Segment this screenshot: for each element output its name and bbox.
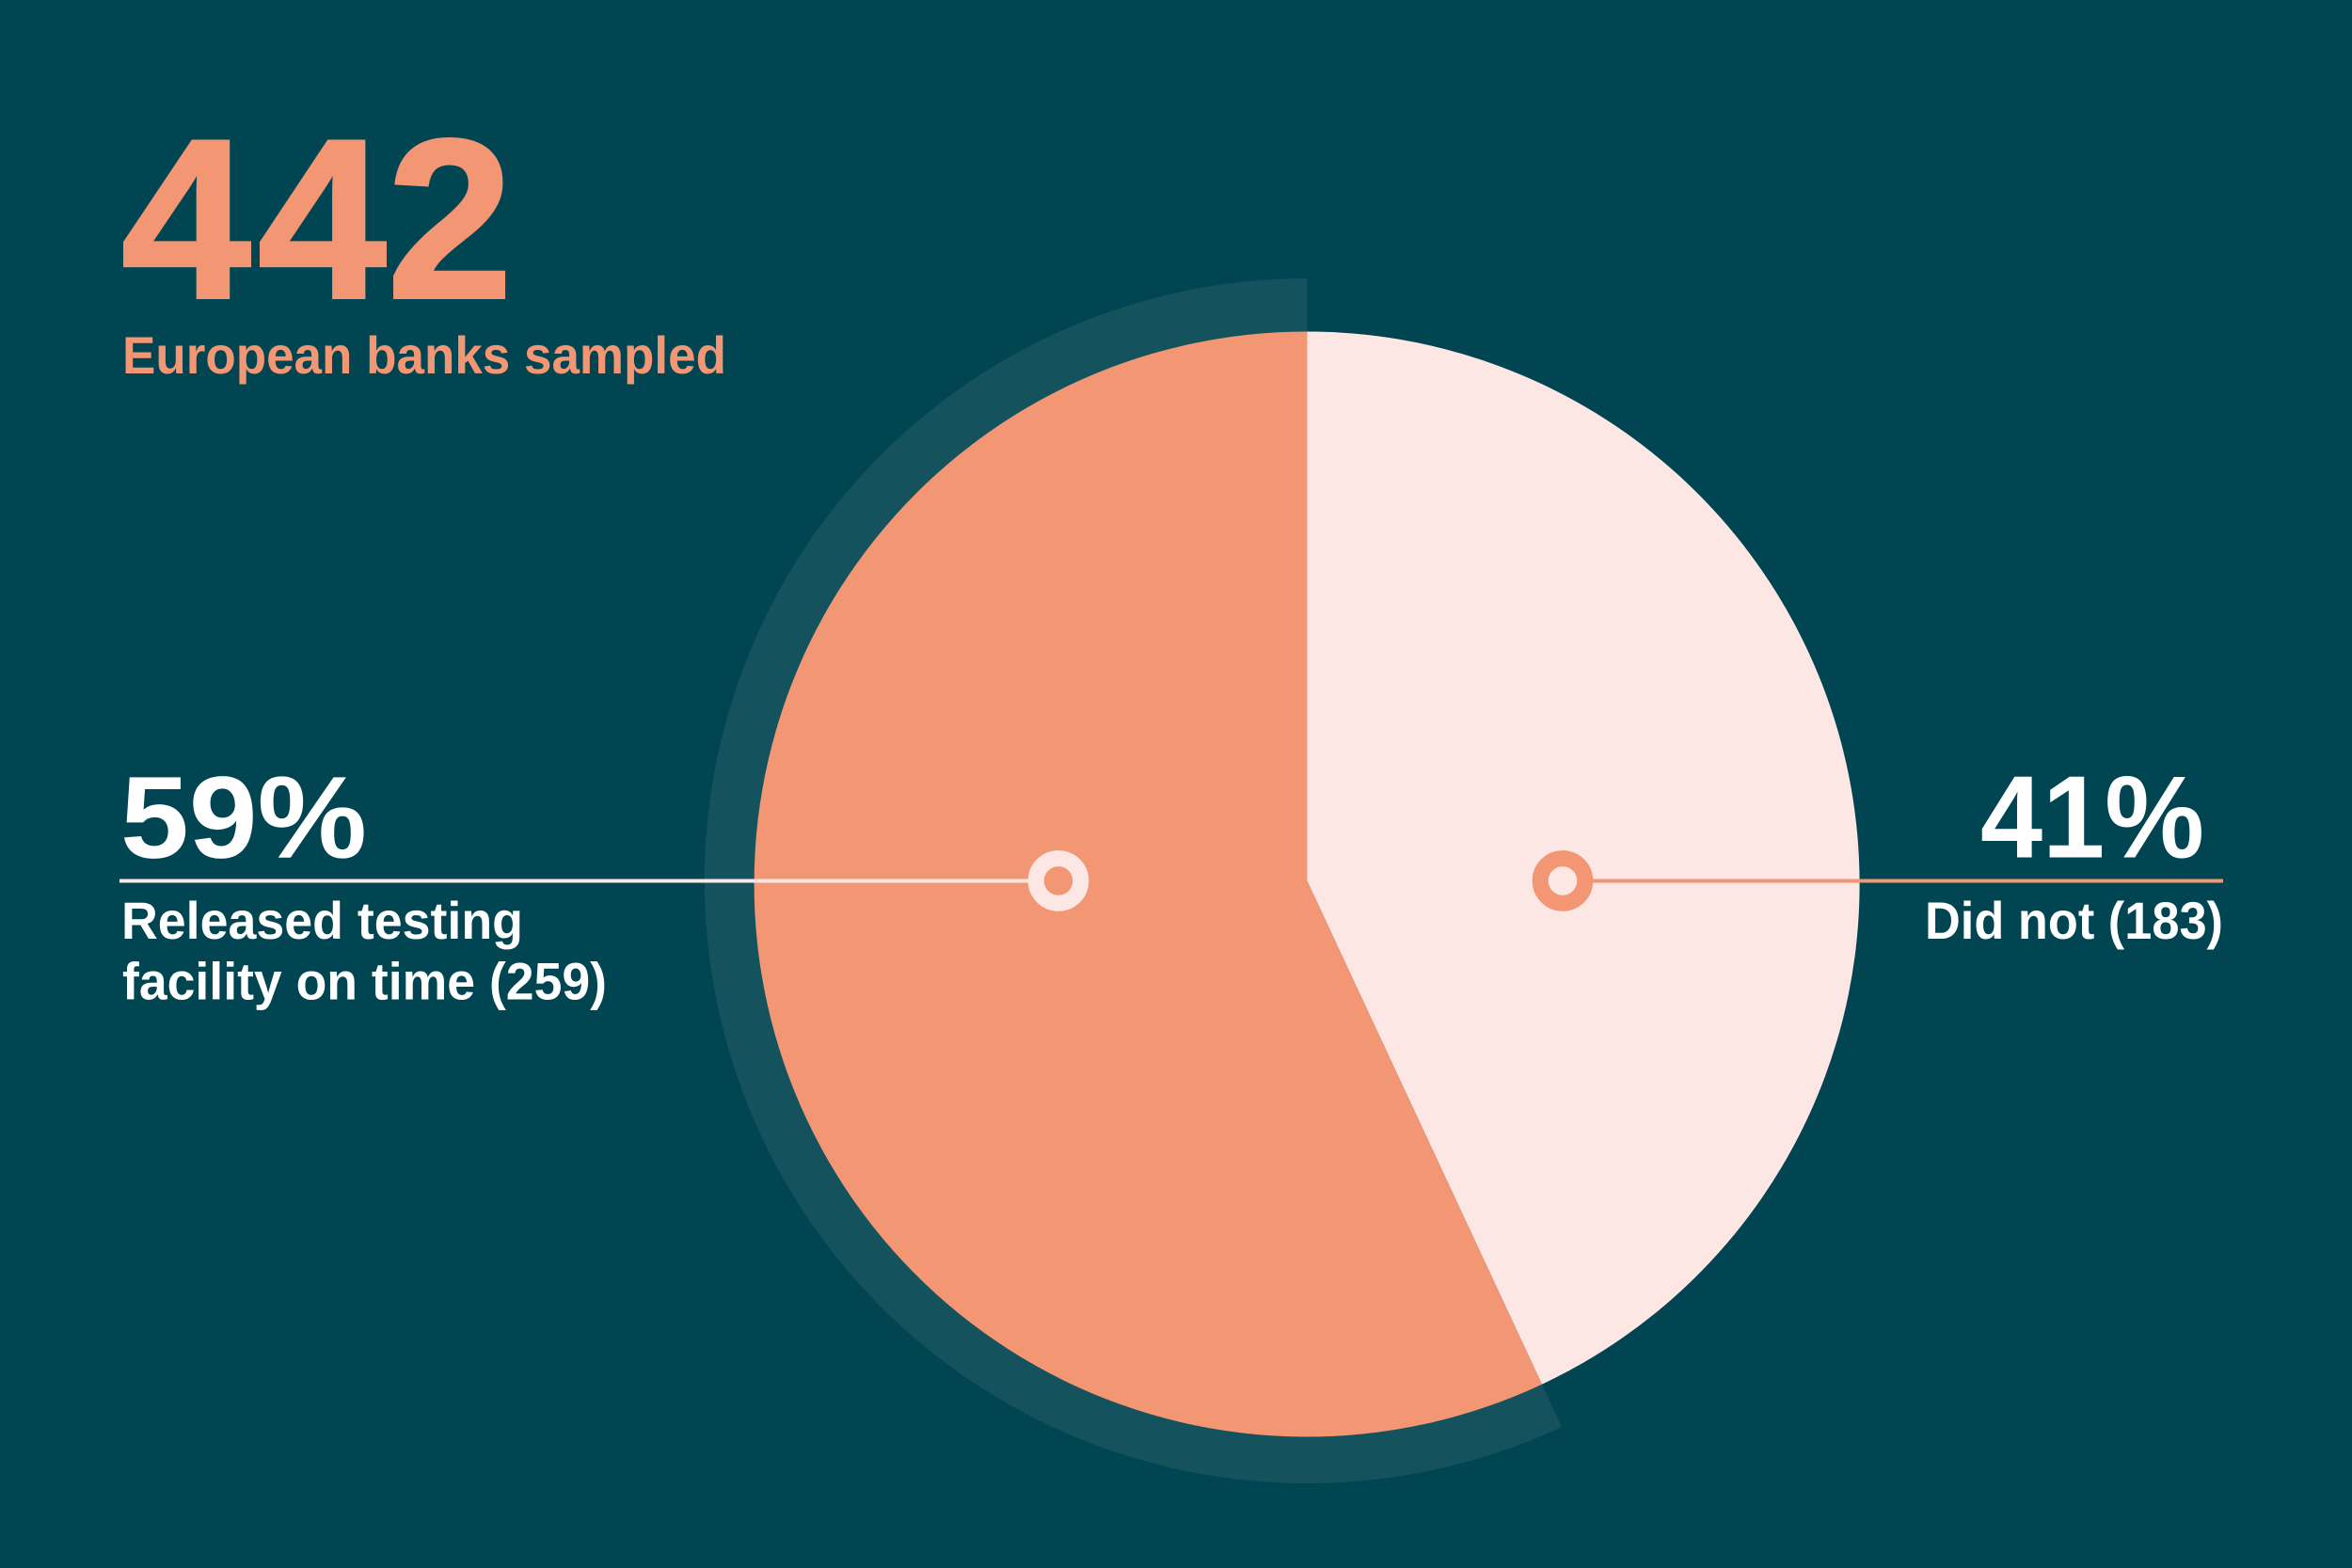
outer highlight arc for 59% share bbox=[705, 278, 1562, 1483]
label: did not: Did not (183) bbox=[1925, 891, 2223, 950]
headline number: 2 bbox=[387, 92, 513, 346]
headline caption: European banks sampled bbox=[122, 325, 726, 385]
label: released testing facility on time: Released testing bbox=[121, 891, 523, 950]
pie slice: released on time, 59% bbox=[755, 331, 1542, 1436]
leader line: right bbox=[1581, 879, 2223, 882]
leader line: left bbox=[119, 879, 1032, 882]
pie chart bbox=[705, 278, 1860, 1483]
percentage: 41%: 41% bbox=[1980, 753, 2204, 883]
percentage: 59%: 59% bbox=[120, 753, 367, 883]
pie slice: did not, 41% bbox=[1308, 331, 1860, 1385]
marker ring: right bbox=[1540, 859, 1585, 903]
label: released testing facility on time: facility on time (259) bbox=[122, 952, 607, 1011]
headline number: 4 bbox=[121, 92, 251, 346]
marker ring: left bbox=[1036, 859, 1081, 903]
left callout: 59% bbox=[119, 753, 1081, 1011]
right callout: 41% bbox=[1540, 753, 2223, 950]
headline number: 4 bbox=[258, 92, 387, 346]
